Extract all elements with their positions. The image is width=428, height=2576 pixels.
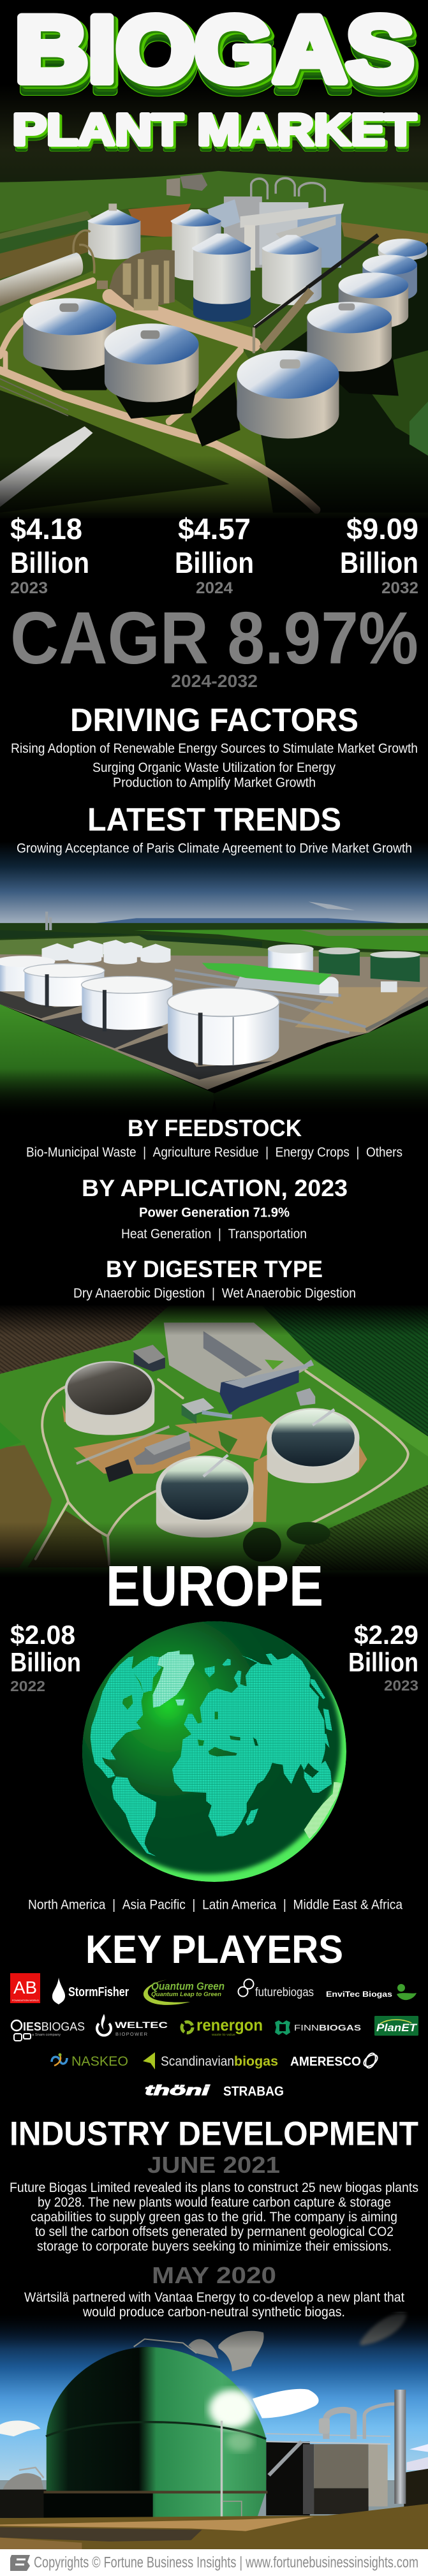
stat: 2023 market size: Billion [10, 546, 89, 579]
logo: Weltec Biopower: WELTEC [115, 2020, 168, 2030]
logo: Naskeo: NASKEO [71, 2054, 128, 2069]
text: digester segments: Dry Anaerobic Digestion | Wet Anaerobic Digestion [73, 1286, 356, 1301]
logo: Renergon [182, 2015, 263, 2037]
logo: Scandinavian Biogas: Scandinavian [161, 2054, 234, 2069]
footer bar [0, 2549, 428, 2576]
heading: Europe: EUROPE [106, 1555, 323, 1618]
stat: Europe 2023: 2023 [384, 1677, 418, 1694]
logo: AB: FOUNDATION WORLD [12, 1999, 39, 2002]
logo: IES Biogas [11, 2020, 85, 2041]
logo: Weltec Biopower [97, 2014, 168, 2037]
text: application segments: Heat Generation | Transportation [121, 1227, 307, 1241]
text: May 2020 development: would produce carbon-neutral synthetic biogas. [82, 2305, 345, 2320]
tank A [167, 988, 279, 1065]
logo: Ameresco: AMERESCO [290, 2055, 361, 2069]
stat: Europe 2023: Billion [348, 1647, 418, 1677]
text: driving factors list: Production to Amplify Market Growth [113, 776, 316, 790]
logo: IES Biogas: IESBIOGAS [23, 2020, 85, 2033]
logo: Naskeo [52, 2053, 128, 2069]
process building [266, 2434, 390, 2515]
continents: Kamchatka, Japan and South-East Asia [304, 1679, 332, 1793]
logo: StormFisher: StormFisher [68, 1985, 129, 1999]
clouds [0, 2313, 428, 2470]
stacks and pipes [326, 2404, 394, 2439]
low tank c [237, 350, 339, 439]
horizontal gas pipe [0, 253, 83, 306]
logo: Quantum Green [144, 1980, 225, 2005]
continents: Madagascar [246, 1809, 258, 1826]
title [13, 0, 416, 154]
stat: 2032 market size: $9.09 [346, 512, 418, 545]
continents: Americas [91, 1656, 144, 1778]
logo: Finnbiogas: FINN BIOGAS [294, 2023, 361, 2032]
low tank a [23, 298, 116, 370]
stat: 2023 market size [10, 512, 89, 597]
stat: Europe 2022: Billion [10, 1647, 81, 1677]
heading: by digester type: BY DIGESTER TYPE [106, 1256, 323, 1282]
third photo: aerial view of domed digesters [0, 1304, 428, 1576]
logo: AB [10, 1973, 40, 2003]
text: other regions: North America | Asia Pacific | Latin America | Middle East & Africa [28, 1897, 402, 1913]
logo: futurebiogas [239, 1979, 314, 1999]
continents: Eurasia and Africa [172, 1654, 325, 1836]
silo: front right [262, 235, 321, 305]
silo: front center with blue base [192, 233, 251, 322]
gravel base and grass [0, 2504, 428, 2549]
diagonal pipe rack [254, 235, 378, 353]
CAGR figure: 2024-2032 [171, 671, 258, 691]
heading: key players: KEY PLAYERS [85, 1928, 343, 1972]
text: June 2021 development: to sell the carbon offsets generated by permanent geological CO2 [35, 2224, 394, 2239]
low tank d [307, 302, 392, 372]
background small tanks [41, 940, 170, 965]
logo: EnviTec Biogas [326, 1984, 417, 2000]
stat: 2032 market size: 2032 [381, 579, 418, 597]
dirt patches [63, 1405, 367, 1522]
logo: AB: AB [13, 1978, 37, 1997]
background industrial cluster [166, 174, 344, 270]
date: June 2021: JUNE 2021 [147, 2152, 280, 2178]
silo: back left [87, 204, 140, 260]
stat: Europe 2023: $2.29 [354, 1620, 418, 1650]
text: May 2020 development: Wärtsilä partnered with Vantaa Energy to co-develop a new plant that [24, 2290, 404, 2305]
logo: Scandinavian Biogas [143, 2052, 278, 2069]
stat: 2023 market size: 2023 [10, 579, 48, 597]
buildings [77, 1331, 315, 1482]
tank C [24, 964, 105, 1007]
logo: Finnbiogas [275, 2020, 361, 2035]
logo: futurebiogas: futurebiogas [255, 1986, 314, 1999]
fourth photo: green gas dome and process plant [0, 2313, 428, 2549]
stat: 2024 market size: 2024 [196, 579, 233, 597]
tank B [82, 976, 172, 1032]
silo: back center [170, 209, 221, 281]
logo: EnviTec Biogas: EnviTec Biogas [326, 1990, 392, 1999]
stat: Europe 2023 [348, 1620, 418, 1694]
logo: Weltec Biopower: BIOPOWER [115, 2031, 148, 2037]
logo: Quantum Green: Quantum Leap to Green [151, 1991, 222, 1997]
heading: latest trends: LATEST TRENDS [87, 801, 341, 838]
shadows [41, 359, 399, 447]
background small dome [0, 2468, 47, 2518]
continents: Australia highlight [304, 1782, 341, 1839]
logo: Thoni: thöni [145, 2082, 210, 2098]
pipework and gallery [175, 970, 365, 1033]
title: PLANT MARKET [13, 105, 416, 154]
text: June 2021 development [10, 2180, 418, 2254]
stat: Europe 2022: $2.08 [10, 1620, 75, 1650]
icon: Fortune Business Insights logo [10, 2555, 30, 2571]
logo: PlanET: PlanET [376, 2022, 418, 2034]
text: driving factors list: Surging Organic Waste Utilization for Energy [92, 760, 336, 775]
low tank b [104, 323, 199, 402]
stat: 2023 market size: $4.18 [10, 512, 82, 545]
text: power generation share: Power Generation 71.9% [139, 1206, 290, 1220]
logo: IES Biogas: a Snam company [32, 2033, 61, 2037]
stat: 2024 market size: Billion [175, 546, 254, 579]
continents: Greenland and Iceland [152, 1650, 195, 1708]
logo: Renergon: waste to value [212, 2033, 235, 2037]
text: June 2021 development: capabilities to supply green gas to the grid. The company is aiming [31, 2210, 397, 2224]
fence [0, 379, 68, 416]
hero photo: biogas plant with silos [0, 0, 428, 521]
digester T3 [267, 1408, 360, 1483]
logo: StormFisher [52, 1978, 129, 2004]
logo: Strabag: STRABAG [223, 2084, 284, 2099]
tank E [268, 944, 314, 970]
heading: by application: BY APPLICATION, 2023 [82, 1175, 348, 1201]
green tank G [370, 951, 420, 982]
continents: Arctic islands [205, 1659, 231, 1677]
dirt roads [0, 281, 316, 510]
stat: 2024 market size: $4.57 [178, 512, 251, 545]
text: June 2021 development: by 2028. The new plants would feature carbon capture & storage [38, 2195, 391, 2210]
green gas dome [43, 2339, 267, 2545]
stat: 2032 market size [340, 512, 418, 597]
logo: Ameresco [290, 2052, 380, 2069]
green tank F [318, 947, 360, 975]
treeline [404, 2469, 428, 2509]
gravel paths [36, 1371, 408, 1565]
text: June 2021 development: storage to corporate buyers seeking to minimize their emissions. [37, 2239, 392, 2254]
green roof shed [202, 963, 339, 997]
text: driving factors list [11, 741, 418, 790]
second photo: white storage tanks in fields [0, 842, 428, 1118]
globe [75, 1613, 346, 1882]
logo: PlanET [374, 2016, 418, 2036]
digester T2 [156, 1455, 254, 1537]
stat: Europe 2022: 2022 [10, 1678, 45, 1694]
logo: Quantum Green: Quantum Green [151, 1980, 225, 1992]
logo: Renergon: renergon [196, 2015, 263, 2034]
text: May 2020 development [24, 2290, 404, 2320]
date: May 2020: MAY 2020 [152, 2262, 276, 2288]
heading: by feedstock: BY FEEDSTOCK [128, 1115, 302, 1141]
stat: 2032 market size: Billion [340, 546, 418, 579]
title: BIOGAS [15, 0, 413, 101]
digester T1 [64, 1361, 155, 1435]
stat: Europe 2022 [10, 1620, 81, 1694]
white building corner [0, 426, 92, 507]
low tank f [362, 255, 417, 302]
low tank g [378, 239, 427, 260]
heading: driving factors: DRIVING FACTORS [70, 702, 358, 738]
stat: 2024 market size [175, 512, 254, 597]
tank D [0, 956, 55, 991]
low tank e [339, 272, 408, 329]
central process equipment [97, 249, 175, 311]
logo: Scandinavian Biogas: biogas [234, 2054, 278, 2069]
